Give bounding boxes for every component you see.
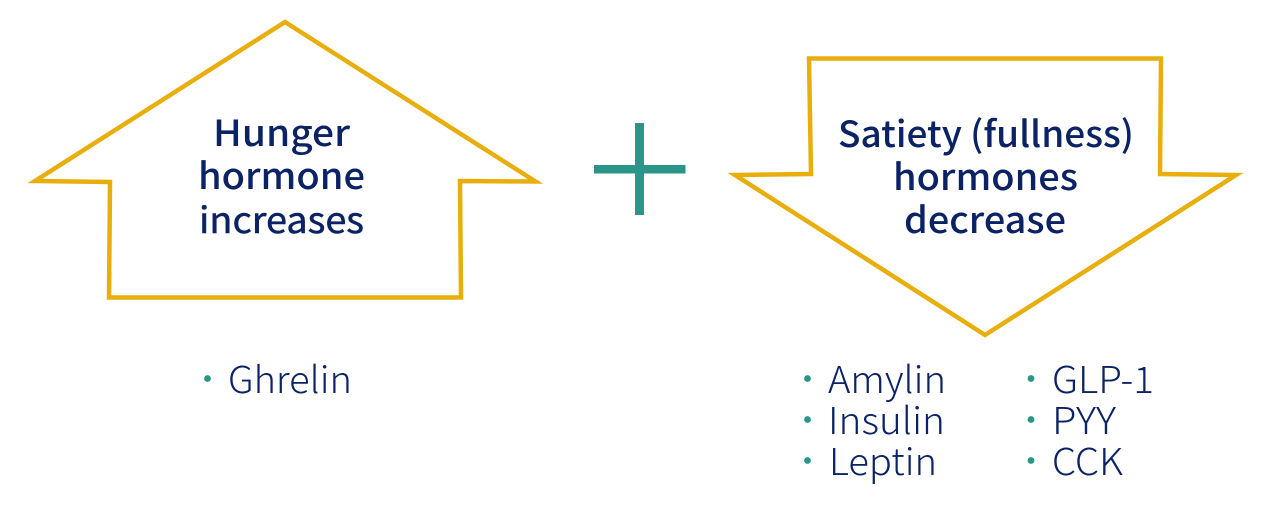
icon: up arrow outline	[35, 22, 536, 298]
panel: hunger up arrow	[35, 22, 536, 298]
heading: hunger hormone increases: hormone	[198, 148, 365, 200]
heading: satiety hormones decrease	[838, 106, 1134, 244]
heading: hunger hormone increases	[198, 105, 365, 244]
list: satiety hormones left column	[804, 350, 946, 486]
panel: satiety down arrow	[735, 58, 1236, 335]
list: satiety hormones right column: CCK	[1052, 432, 1123, 486]
heading: satiety hormones decrease: decrease	[904, 192, 1066, 244]
heading: hunger hormone increases: increases	[199, 192, 364, 244]
list: satiety hormones left column: Amylin	[828, 350, 946, 404]
list: satiety hormones left column: Leptin	[829, 432, 937, 486]
icon: down arrow outline	[735, 58, 1236, 335]
heading: satiety hormones decrease: Satiety (fullness)	[838, 106, 1134, 158]
list: satiety hormones right column: PYY	[1052, 391, 1116, 445]
list: satiety hormones left column: Insulin	[828, 391, 945, 445]
heading: hunger hormone increases: Hunger	[213, 105, 350, 157]
list: satiety hormones right column	[1028, 350, 1154, 486]
heading: satiety hormones decrease: hormones	[893, 149, 1078, 201]
icon: plus sign	[594, 123, 686, 215]
list: satiety hormones right column: GLP-1	[1052, 350, 1154, 404]
list: hunger hormones: Ghrelin	[228, 350, 352, 404]
